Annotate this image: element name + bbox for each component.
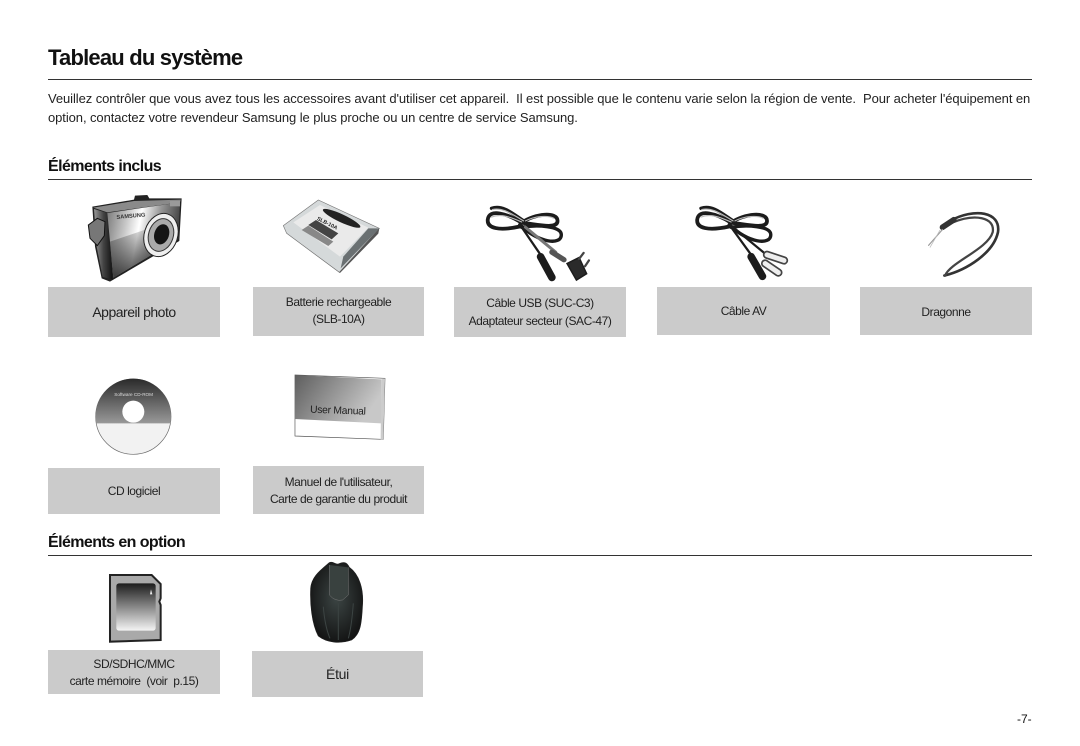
label: user manual xyxy=(253,466,424,514)
label: user manual: Carte de garantie du produit xyxy=(270,492,407,506)
label: battery: Batterie rechargeable xyxy=(286,295,391,309)
label: AV cable: Câble AV xyxy=(721,304,766,318)
label: memory card xyxy=(48,650,220,694)
label: pouch xyxy=(252,651,423,697)
icon: battery xyxy=(283,200,379,273)
icon: camera xyxy=(88,195,184,282)
label: memory card: carte mémoire (voir p.15) xyxy=(70,674,198,688)
icon: user manual: User Manual xyxy=(310,405,366,418)
icon: camera: SAMSUNG xyxy=(116,212,146,221)
label: software CD xyxy=(48,468,220,514)
intro text: option, contactez votre revendeur Samsung le plus proche ou un centre de service Samsung. xyxy=(48,110,578,125)
label: wrist strap: Dragonne xyxy=(921,305,971,319)
icon: AV cable xyxy=(697,207,784,276)
icon: CD-ROM: Software CD-ROM xyxy=(114,392,153,397)
label: memory card: SD/SDHC/MMC xyxy=(93,656,175,670)
intro text: Veuillez contrôler que vous avez tous les accessoires avant d'utiliser cet appareil. Il est possible que le contenu varie selon la région de vente. Pour acheter l'équipement en xyxy=(48,91,1030,106)
page number: -7- xyxy=(1017,712,1032,726)
icon: pouch xyxy=(311,562,363,642)
label: USB cable and adapter: Adaptateur secteur (SAC-47) xyxy=(469,314,611,328)
label: camera xyxy=(48,287,220,337)
label: battery xyxy=(253,287,424,336)
intro text xyxy=(48,91,1030,125)
label: software CD: CD logiciel xyxy=(108,484,160,498)
title: Tableau du système xyxy=(48,45,242,70)
heading: included items: Éléments inclus xyxy=(48,158,161,175)
label: AV cable xyxy=(657,287,830,335)
icon: user manual xyxy=(295,375,385,439)
icon: CD-ROM xyxy=(96,379,171,454)
label: wrist strap xyxy=(860,287,1032,335)
label: USB cable and adapter xyxy=(454,287,626,337)
icon: memory card xyxy=(110,575,161,642)
heading: optional items: Éléments en option xyxy=(48,534,185,551)
label: user manual: Manuel de l'utilisateur, xyxy=(285,474,392,488)
label: pouch: Étui xyxy=(326,666,349,682)
icon: battery: SLB-10A xyxy=(316,216,338,232)
label: battery: (SLB-10A) xyxy=(312,312,365,326)
icon: USB cable and adapter xyxy=(488,207,589,280)
label: camera: Appareil photo xyxy=(92,304,176,320)
label: USB cable and adapter: Câble USB (SUC-C3) xyxy=(486,296,594,310)
icon: wrist strap xyxy=(929,213,998,276)
